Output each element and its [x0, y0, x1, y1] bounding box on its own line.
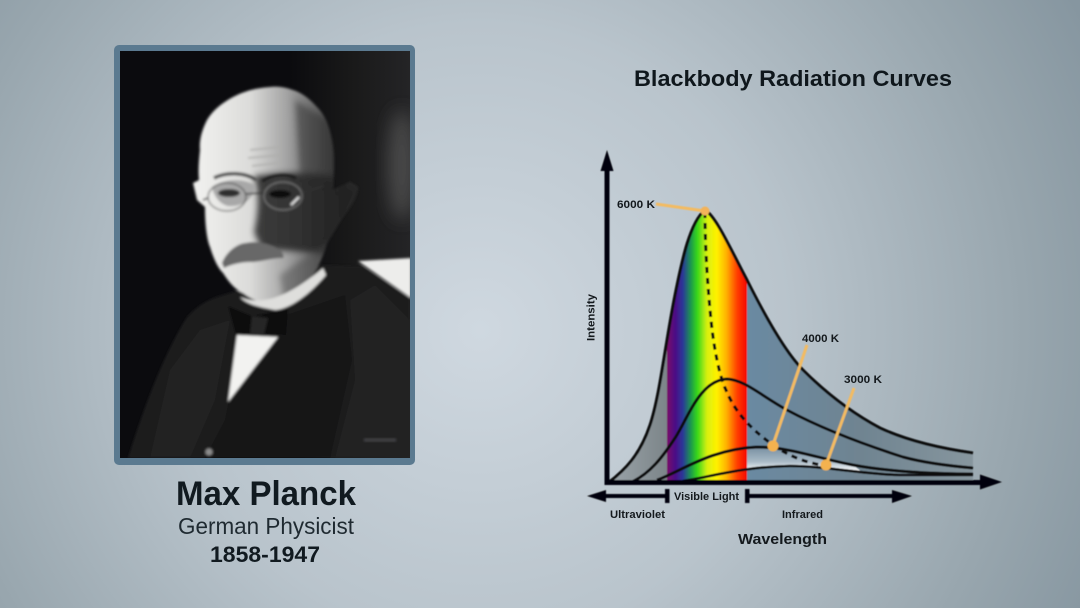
callout marker: 6000 K: [700, 206, 710, 216]
curve: 6000 K: [608, 210, 973, 483]
dashed peak-shift line: [705, 212, 827, 466]
infrared range arrow: [745, 489, 912, 503]
curve: 4000 K: [632, 379, 973, 482]
curve: 3000 K: [657, 447, 973, 480]
callout line: 4000 K: [773, 345, 807, 445]
chart: blackbody radiation curves: [587, 150, 1002, 503]
caption: role: German Physicist: [178, 513, 355, 539]
x axis arrow: [604, 474, 1002, 490]
label: 4000 K: 4000 K: [802, 333, 839, 345]
photo frame: [114, 45, 415, 465]
chart title: Blackbody Radiation Curves: [634, 66, 952, 91]
caption: lifespan: 1858-1947: [210, 542, 320, 567]
y axis arrow: [600, 150, 614, 485]
visible spectrum band: [667, 200, 747, 483]
callout line: 6000 K: [656, 204, 705, 211]
area under the 6000 K curve: [607, 200, 977, 483]
caption: name: Max Planck: [176, 475, 356, 513]
ultraviolet range arrow: [587, 489, 670, 503]
curve: lowest temperature: [683, 466, 973, 481]
callout marker: 4000 K: [768, 440, 778, 452]
portrait photograph: [120, 51, 416, 458]
label: 3000 K: 3000 K: [844, 374, 882, 386]
callout line: 3000 K: [826, 388, 854, 465]
label: Ultraviolet: Ultraviolet: [610, 509, 665, 521]
callout marker: 3000 K: [820, 460, 832, 470]
label: Visible Light: Visible Light: [674, 491, 739, 503]
label: Infrared: Infrared: [782, 509, 823, 521]
panel: portrait of Max Planck: [114, 45, 416, 465]
y axis label: Intensity: Intensity: [586, 293, 598, 341]
label: 6000 K: 6000 K: [617, 199, 655, 211]
x axis label: Wavelength: Wavelength: [738, 531, 827, 548]
